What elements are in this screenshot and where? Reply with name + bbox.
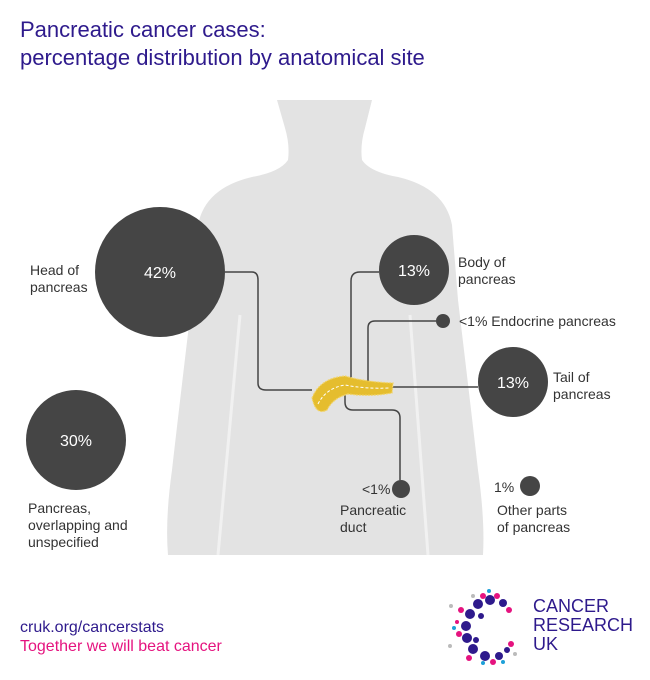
title bbox=[20, 17, 425, 70]
text: <1% bbox=[362, 481, 390, 497]
chart: body silhouette with sites: 13% bbox=[497, 375, 529, 392]
text: pancreas bbox=[553, 386, 611, 402]
text: overlapping and bbox=[28, 517, 128, 533]
text: Pancreas, bbox=[28, 500, 91, 516]
text: of pancreas bbox=[497, 519, 570, 535]
logo: CANCER bbox=[533, 596, 609, 616]
text: 1% bbox=[494, 479, 514, 495]
logo: RESEARCH bbox=[533, 615, 633, 635]
logo: UK bbox=[533, 634, 558, 654]
connector lines bbox=[225, 272, 478, 480]
pancreas bbox=[312, 376, 393, 412]
title: percentage distribution by anatomical site bbox=[20, 45, 425, 70]
labels: Head of bbox=[30, 262, 79, 278]
text: <1% Endocrine pancreas bbox=[459, 313, 616, 329]
text: Other parts bbox=[497, 502, 567, 518]
footer text: cruk.org/cancerstats bbox=[20, 619, 164, 636]
text: Body of bbox=[458, 254, 505, 270]
labels: pancreas bbox=[30, 279, 88, 295]
text: Tail of bbox=[553, 369, 590, 385]
title: Pancreatic cancer cases: bbox=[20, 17, 266, 42]
labels bbox=[30, 262, 88, 295]
chart: body silhouette with sites: 30% bbox=[60, 433, 92, 450]
circles bbox=[26, 207, 548, 498]
logo bbox=[448, 589, 633, 665]
body silhouette bbox=[167, 100, 483, 555]
text: pancreas bbox=[458, 271, 516, 287]
chart: body silhouette with sites: 42% bbox=[144, 265, 176, 282]
chart: body silhouette with sites: 13% bbox=[398, 263, 430, 280]
text: unspecified bbox=[28, 534, 99, 550]
footer text bbox=[20, 619, 222, 655]
footer text: Together we will beat cancer bbox=[20, 638, 222, 655]
text: duct bbox=[340, 519, 366, 535]
text: Pancreatic bbox=[340, 502, 406, 518]
